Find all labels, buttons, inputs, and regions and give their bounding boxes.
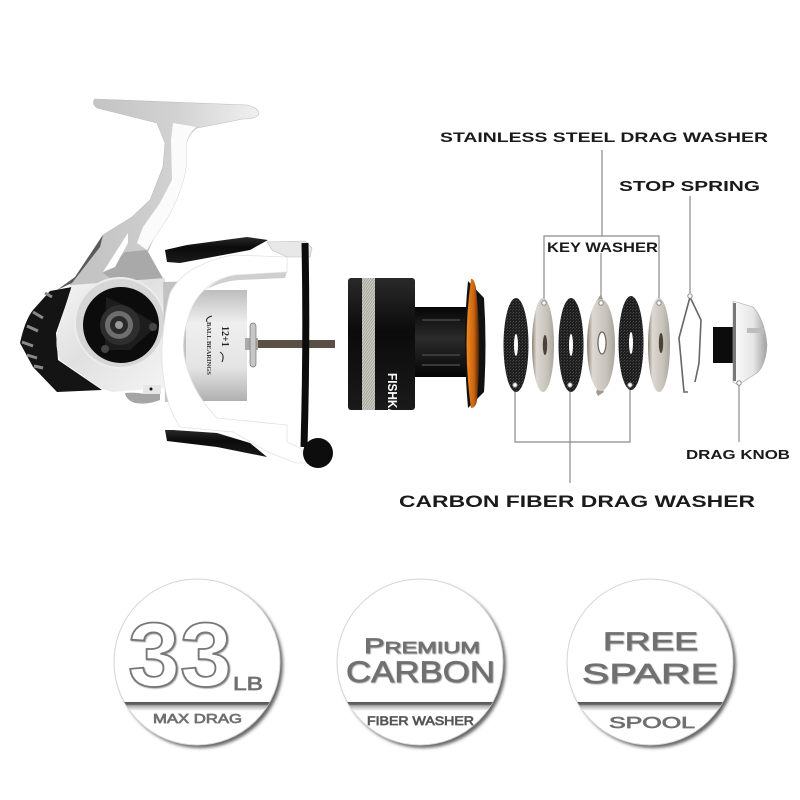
- spool label: BALL BEARINGS: [205, 322, 212, 375]
- drive shaft: [258, 340, 335, 348]
- label: key washer: KEY WASHER: [547, 239, 658, 255]
- spool label: [205, 316, 230, 375]
- badge heading: FREE: [603, 628, 698, 656]
- badge main word: CARBON: [346, 656, 495, 689]
- drag knob: [713, 301, 767, 385]
- illustration: spinning reel: [20, 97, 350, 468]
- carbon washer 1: [504, 298, 528, 392]
- bottom black arm: [165, 430, 267, 457]
- stem lower shading: [103, 250, 165, 285]
- badge: 33 lb max drag: [110, 579, 290, 748]
- stem highlight: [137, 123, 196, 250]
- badge caption: FIBER WASHER: [367, 714, 474, 728]
- steel washer 3: [648, 298, 670, 392]
- spool neck grooves: [422, 320, 460, 365]
- top bail mount: [267, 241, 312, 257]
- label: stainless steel drag washer: STAINLESS STEEL DRAG WASHER: [440, 129, 768, 145]
- grip ridges: [22, 293, 52, 368]
- spool orange flange: [466, 279, 479, 408]
- label: stop spring: STOP SPRING: [619, 178, 760, 195]
- spool label: 12+1: [219, 326, 230, 347]
- white bail arm: [162, 255, 307, 463]
- spare spool: [348, 278, 486, 418]
- badge caption: SPOOL: [609, 715, 696, 732]
- spool back flange: [465, 281, 486, 408]
- reel handle stem and crossbar: [70, 99, 259, 285]
- bail inner shade: [195, 272, 287, 305]
- grey rotor housing: [163, 281, 195, 402]
- spool neck: [415, 307, 469, 377]
- silver spool cylinder: [186, 290, 247, 401]
- steel washer 2: [587, 294, 615, 396]
- steel washer 1: [532, 298, 554, 392]
- badge main word: SPARE: [582, 658, 718, 689]
- spool brand text: FISHKA: [385, 373, 400, 418]
- bail lever: [125, 385, 161, 404]
- badge: premium carbon fiber washer: [333, 579, 513, 748]
- rotor interior: [83, 287, 159, 363]
- shaft gear: [245, 323, 258, 367]
- top black arm: [165, 237, 268, 263]
- dark grey wedge: [57, 235, 103, 290]
- label: drag knob: DRAG KNOB: [686, 447, 790, 462]
- label: carbon fiber drag washer: CARBON FIBER DRAG WASHER: [399, 492, 755, 511]
- bail wire: [304, 243, 306, 447]
- frame window: [103, 233, 128, 272]
- spool knurled band: [362, 278, 375, 410]
- black grip: [20, 287, 102, 392]
- reel body: [56, 278, 165, 392]
- stop spring: [679, 297, 701, 392]
- bail roller knob: [303, 438, 333, 468]
- badge: free spare spool: [563, 579, 743, 748]
- rotor ring: [75, 278, 165, 368]
- rotor gear detail: [100, 297, 158, 353]
- leader lines: [515, 150, 739, 483]
- carbon washer 3: [618, 296, 644, 390]
- connector dots: [513, 294, 741, 387]
- badge caption: MAX DRAG: [153, 712, 242, 726]
- badge number: 33: [128, 605, 232, 706]
- badge unit: LB: [233, 674, 263, 694]
- carbon washer 2: [558, 298, 584, 392]
- badge heading: P REMIUM: [364, 635, 480, 658]
